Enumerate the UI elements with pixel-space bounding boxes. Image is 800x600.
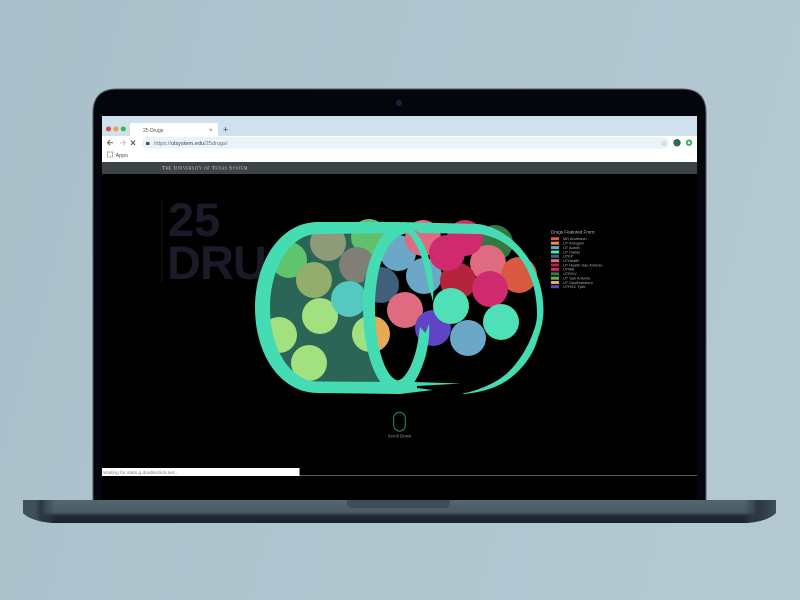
active tab: × — [209, 128, 213, 134]
page title faded — [162, 193, 332, 289]
infographic scene — [23, 88, 776, 523]
legend: UTEP — [563, 254, 574, 259]
bookmarks bar: Apps — [116, 153, 128, 159]
address bar — [142, 137, 669, 148]
pill left interior — [268, 233, 390, 382]
legend: UT Arlington — [563, 241, 584, 246]
legend: MD Anderson — [563, 236, 587, 241]
new tab button: + — [223, 124, 228, 134]
laptop base — [23, 500, 776, 523]
legend: UTRGV — [563, 271, 577, 276]
address bar: ☆ — [661, 140, 667, 148]
address bar: https://utsystem.edu/25drugs/ — [154, 141, 228, 147]
legend — [551, 230, 603, 289]
pill left outline — [255, 222, 461, 394]
pill centre ellipse lower right band — [398, 324, 429, 394]
front circles over the outline — [433, 288, 519, 340]
window buttons — [106, 126, 126, 132]
mouse icon — [394, 412, 405, 431]
university header bar: The University of Texas System — [162, 166, 248, 172]
legend: UT Southwestern — [563, 280, 593, 285]
circles inside left half — [270, 234, 346, 381]
active tab: 25 Drugs — [143, 128, 164, 134]
active tab — [130, 123, 218, 136]
legend: UTHSC Tyler — [563, 284, 587, 289]
webcam — [396, 100, 402, 106]
laptop lid — [93, 89, 706, 502]
pill right outline — [400, 222, 544, 394]
browser status bubble: Waiting for stats.g.doubleclick.net... — [103, 470, 178, 476]
legend: UTHealth — [563, 258, 579, 263]
navigation buttons — [108, 140, 135, 145]
legend: UT Dallas — [563, 249, 580, 254]
legend: UT San Antonio — [563, 276, 590, 281]
legend: UT Health San Antonio — [563, 262, 603, 267]
circles across the pill — [331, 219, 537, 356]
browser status bubble — [102, 468, 697, 476]
scroll down indicator: Scroll Down — [388, 434, 412, 438]
profile icons — [673, 139, 692, 146]
page title faded: 25 — [168, 193, 220, 246]
screen — [102, 116, 697, 500]
hinge notch — [347, 500, 450, 508]
browser chrome — [102, 116, 697, 162]
pill infographic — [255, 219, 544, 394]
university header bar — [102, 162, 697, 174]
pill centre ellipse left band — [363, 222, 434, 394]
toolbar — [102, 136, 697, 149]
legend: UTMB — [563, 267, 574, 272]
scroll down indicator — [388, 412, 412, 438]
bookmarks bar — [102, 149, 697, 162]
legend title: Drugs Featured From: — [551, 230, 595, 234]
legend: UT Austin — [563, 245, 580, 250]
page title faded: DRUGS — [167, 236, 332, 289]
tab strip — [102, 116, 697, 136]
